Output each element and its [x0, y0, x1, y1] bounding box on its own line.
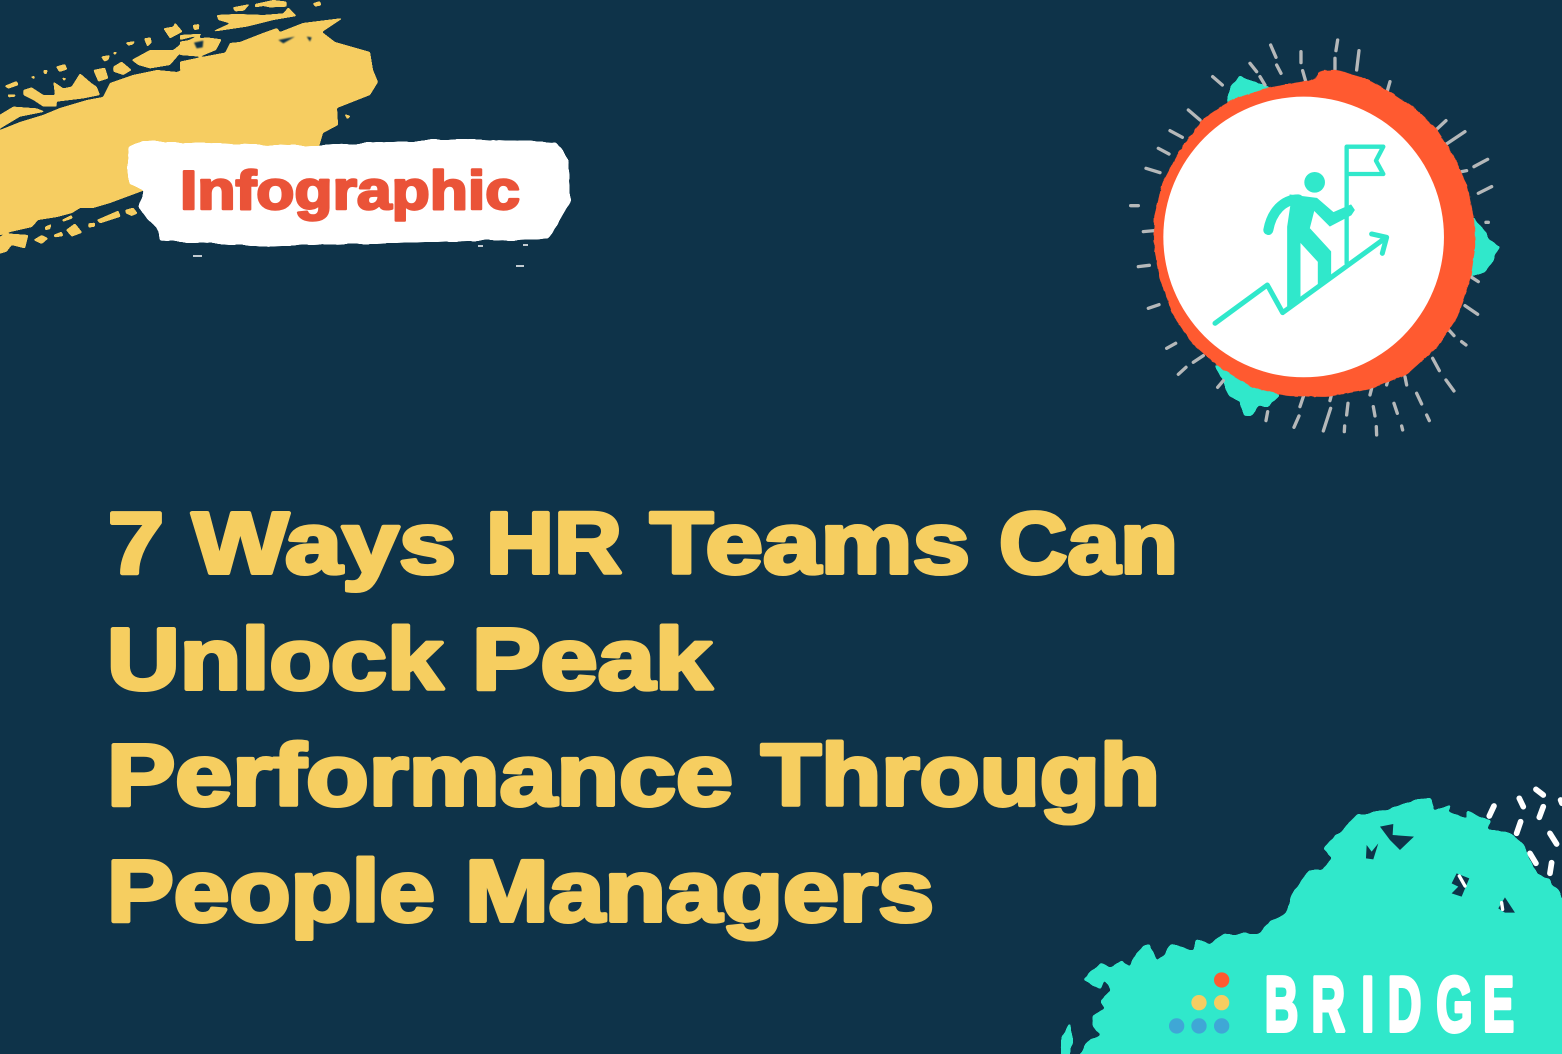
teal splash with Bridge logo: [1060, 789, 1562, 1054]
title: Through: [761, 727, 1160, 824]
title: People: [107, 843, 435, 940]
dark cut-outs in splash: [1366, 824, 1515, 913]
white brush label: [128, 140, 570, 267]
title: Ways: [192, 495, 456, 592]
title: Teams: [650, 495, 970, 592]
logo wordmark: BRIDGE: BRIDGE: [1265, 961, 1514, 1048]
title: Unlock: [107, 611, 444, 708]
title: HR: [486, 495, 622, 592]
white circle: [1163, 97, 1444, 377]
yellow brush stroke: [0, 0, 378, 255]
title: 7: [108, 495, 164, 592]
white dashes around splash: [1489, 789, 1562, 873]
teal splash shape: [1060, 797, 1562, 1054]
icon: climber with flag on rising arrow: [1215, 147, 1387, 323]
logo dots: [1169, 972, 1229, 1034]
title: Peak: [472, 611, 713, 708]
title: [107, 495, 1178, 940]
radiating gray dashes: [1131, 40, 1492, 435]
title: Managers: [465, 843, 934, 940]
orange brushed ring: [1155, 71, 1474, 396]
label text: Infographic: Infographic: [180, 159, 520, 221]
title: Can: [999, 495, 1178, 592]
title: Performance: [107, 727, 733, 824]
teal splashes behind the circle: [1215, 76, 1499, 417]
emblem: climber in circle: [1131, 40, 1499, 435]
